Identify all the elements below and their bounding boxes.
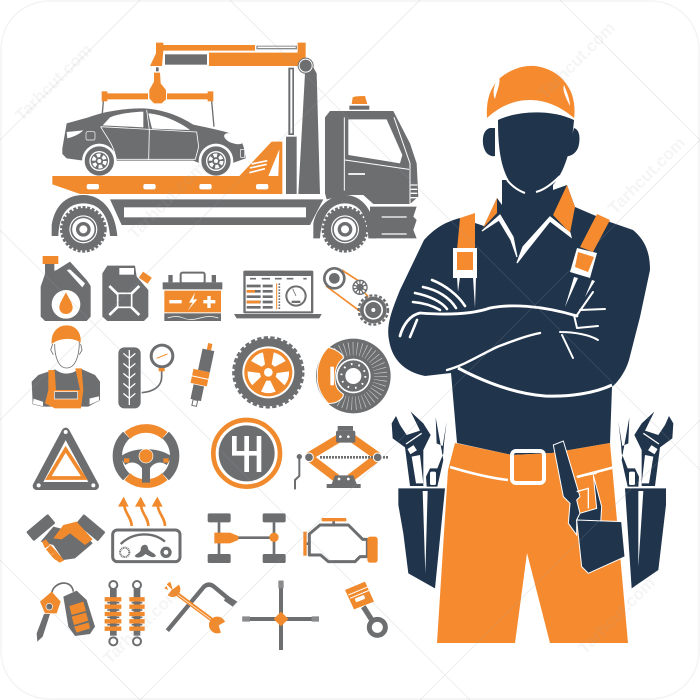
icon: wheel with orange rim — [233, 337, 303, 407]
worker orange trousers — [437, 443, 628, 643]
icon: tow truck with crane — [52, 43, 418, 251]
icon: car battery — [163, 273, 222, 321]
icons row 1 and 2 — [32, 256, 391, 413]
worker tool pouch — [553, 441, 625, 573]
icon: tyre pressure gauge — [118, 344, 174, 408]
car on flatbed — [62, 108, 246, 178]
icon: oil canister — [41, 256, 91, 321]
icon: gear shift pattern — [213, 420, 280, 487]
watermark overlay: Tarhcut.com — [11, 40, 96, 125]
crane arm — [150, 43, 306, 66]
chassis — [52, 195, 323, 236]
icon: climate control panel — [113, 497, 180, 562]
icon: spark plug — [186, 341, 216, 408]
watermark overlay: Tarhcut.com — [124, 158, 209, 243]
worker collar — [482, 185, 575, 263]
icon: crossed wrenches — [162, 578, 237, 635]
icon: steering wheel — [117, 426, 175, 486]
worker head with ears — [483, 112, 579, 193]
worker tool holsters and tools — [392, 412, 673, 588]
truck column — [286, 58, 320, 194]
watermark overlay: Tarhcut.com — [604, 133, 689, 218]
truck cab — [313, 96, 418, 238]
icon: car keys and fob — [37, 583, 95, 642]
worker belt and buckle — [450, 451, 615, 483]
watermark overlay: Tarhcut.com — [99, 583, 184, 668]
worker figure — [388, 66, 673, 643]
worker hard hat — [487, 66, 575, 118]
icon: scissor jack — [295, 426, 388, 489]
icon: car axle drivetrain — [208, 513, 286, 563]
watermark overlay: Tarhcut.com — [574, 573, 659, 658]
icon: small mechanic — [32, 325, 100, 408]
watermark overlay: Tarhcut.com — [534, 18, 619, 103]
icon: diagnostic laptop — [234, 271, 322, 318]
icon: warning triangle — [37, 430, 95, 487]
icon: brake disc and caliper — [316, 339, 391, 413]
icon: shock absorbers — [105, 581, 145, 645]
icon: engine — [303, 518, 378, 563]
icon: cross lug wrench — [242, 581, 319, 650]
worker suspender straps — [453, 213, 610, 308]
truck wheels — [61, 207, 367, 251]
icon: timing belt pulleys — [323, 267, 388, 325]
crane hook and spreader bar — [102, 67, 214, 127]
worker torso and arms — [388, 180, 650, 455]
icons rows 3 to 5 — [26, 420, 388, 650]
worker crossed arm lines — [400, 280, 605, 370]
icon: engine piston — [345, 582, 385, 635]
icon: jerry can — [102, 266, 152, 321]
flatbed — [52, 142, 282, 194]
icon: handshake — [26, 514, 106, 563]
